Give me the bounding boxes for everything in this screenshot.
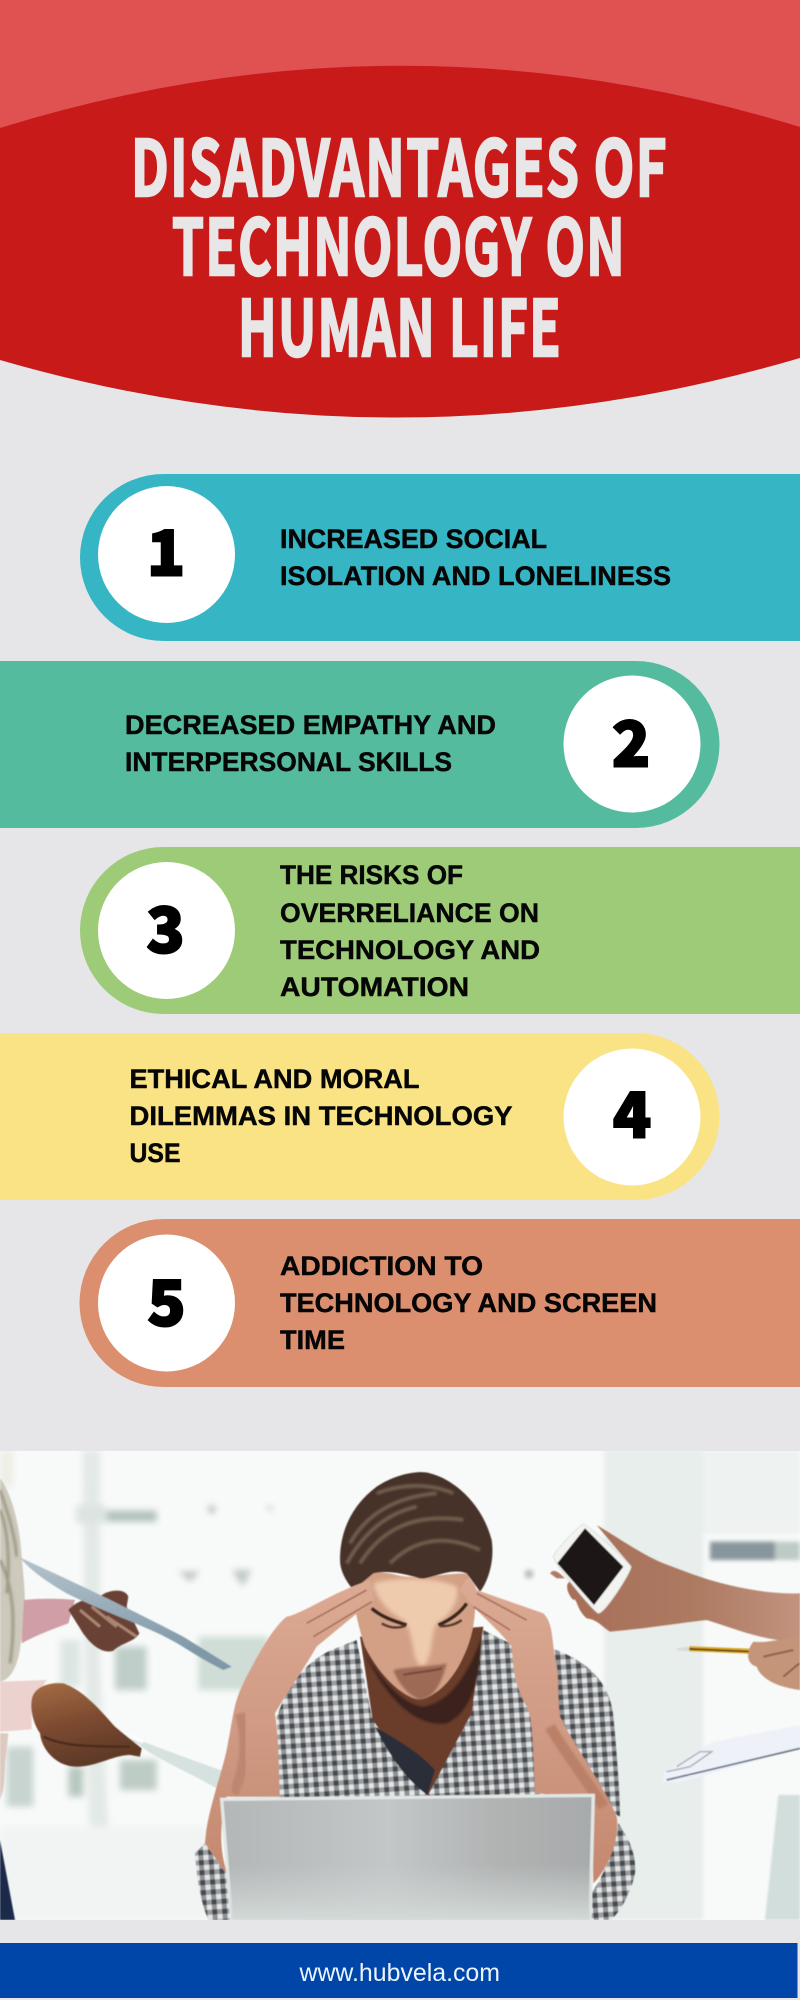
text: item 1 — [280, 524, 671, 591]
text: item 5: ADDICTION TO — [280, 1251, 483, 1281]
text: item 4: DILEMMAS IN TECHNOLOGY — [130, 1101, 512, 1131]
paper — [130, 1738, 279, 1798]
text: item 5: TIME — [280, 1325, 345, 1355]
right cuff — [590, 1823, 635, 1920]
right side hands: phone, pencil, paper — [550, 1524, 800, 1783]
phone — [553, 1524, 631, 1613]
text: item 4 — [130, 1064, 512, 1168]
number badge 2 — [564, 676, 700, 812]
number badge 1 — [98, 486, 235, 623]
panel: item 2 empathy — [0, 661, 720, 828]
left side people: blouse, hands, tablet and paper — [0, 1478, 300, 1920]
pencil hand — [748, 1635, 800, 1690]
hair — [340, 1472, 492, 1592]
face — [353, 1572, 475, 1699]
blouse — [0, 1478, 25, 1682]
number badge 3 — [98, 862, 235, 999]
number badge 1: 1 — [147, 504, 185, 594]
number badge 4: 4 — [613, 1066, 651, 1156]
tablet — [20, 1557, 232, 1670]
text: item 3 — [280, 860, 540, 1002]
upper sleeve — [22, 1599, 75, 1643]
trousers — [0, 1840, 15, 1920]
right arm — [460, 1579, 617, 1883]
central man — [195, 1472, 635, 1920]
left arm — [205, 1580, 374, 1877]
text: item 3: THE RISKS OF — [280, 860, 463, 890]
left cuff — [195, 1843, 232, 1920]
text: item 3: OVERRELIANCE ON — [280, 898, 539, 928]
text: item 4: USE — [130, 1138, 180, 1168]
paper — [662, 1725, 800, 1783]
text: item 4: ETHICAL AND MORAL — [130, 1064, 420, 1094]
blurred office background — [0, 1450, 800, 1920]
text: item 2: INTERPERSONAL SKILLS — [125, 747, 452, 777]
laptop — [222, 1795, 593, 1920]
number badge 3: 3 — [146, 880, 185, 972]
panel: item 1 social isolation — [80, 474, 800, 641]
lower sleeve — [0, 1680, 47, 1732]
phone hand and arm — [567, 1525, 800, 1642]
text: item 3: TECHNOLOGY AND — [280, 935, 540, 965]
photo: stressed man at laptop surrounded by hands — [0, 1450, 800, 1920]
text: item 3: AUTOMATION — [280, 972, 469, 1002]
pencil — [676, 1645, 750, 1654]
text: item 1: INCREASED SOCIAL — [280, 524, 547, 554]
text: item 2 — [125, 710, 496, 777]
number badge 5: 5 — [147, 1254, 186, 1344]
header band — [0, 0, 800, 200]
upper hand — [68, 1591, 139, 1651]
neck and chest — [360, 1627, 483, 1797]
text: item 5: TECHNOLOGY AND SCREEN — [280, 1288, 657, 1318]
header ellipse — [0, 66, 800, 418]
panel: item 4 ethics — [0, 1033, 720, 1200]
text: item 5 — [280, 1251, 657, 1355]
footer bar — [0, 1943, 798, 1998]
number badge 4 — [564, 1048, 700, 1186]
number badge 2: 2 — [612, 694, 650, 786]
panel: item 5 addiction — [80, 1219, 800, 1387]
lower hand — [31, 1683, 142, 1767]
text: item 1: ISOLATION AND LONELINESS — [280, 561, 671, 591]
title: HUMAN LIFE — [238, 268, 562, 379]
undershirt — [375, 1727, 435, 1795]
footer website: www.hubvela.com — [299, 1959, 500, 1987]
title — [131, 108, 668, 379]
panel: item 3 overreliance — [80, 847, 800, 1014]
text: item 2: DECREASED EMPATHY AND — [125, 710, 496, 740]
number badge 5 — [98, 1234, 235, 1372]
shirt — [277, 1630, 620, 1817]
